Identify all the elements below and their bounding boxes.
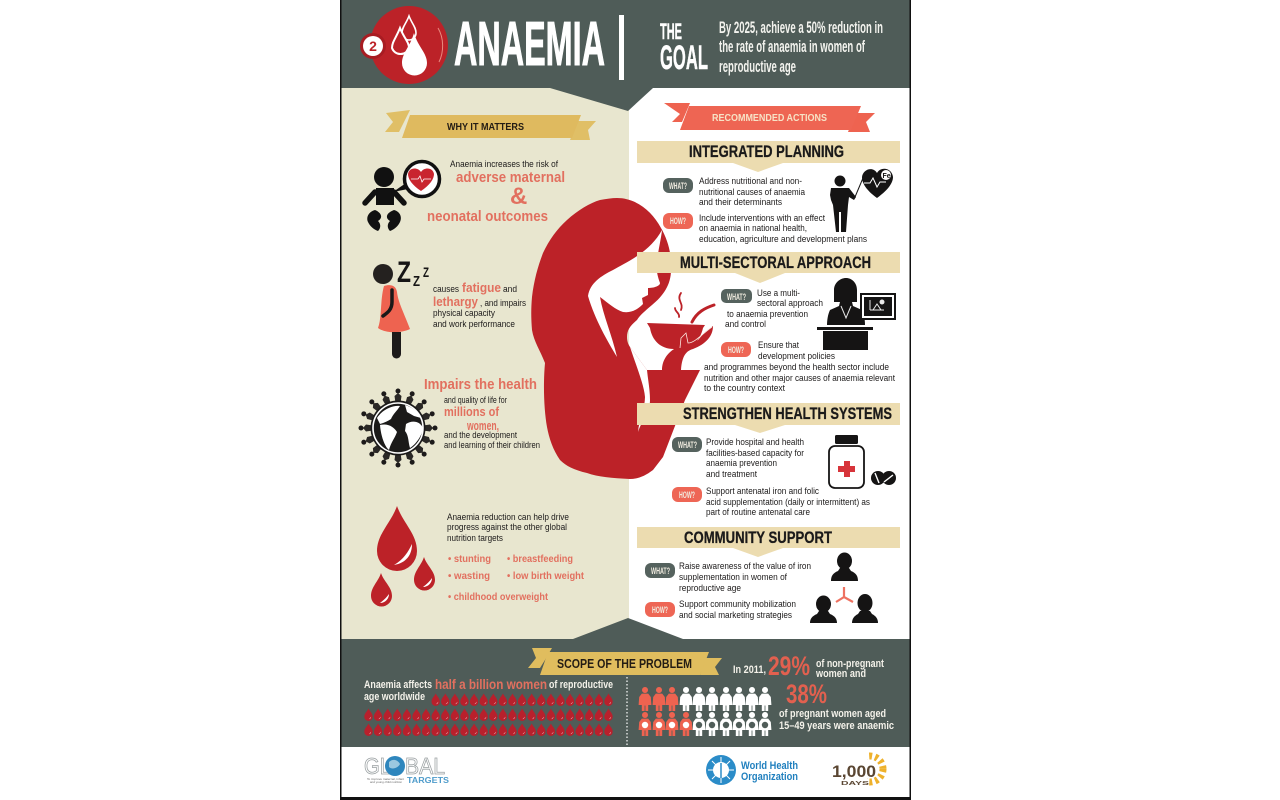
section: multi-sectoral approach: sectoral approach — [757, 298, 823, 308]
text: other global nutrition targets: Anaemia reduction can help drive — [447, 512, 569, 522]
logo: world health organization — [706, 755, 798, 785]
section: integrated planning: INTEGRATED PLANNING — [689, 142, 844, 161]
text: half a billion women — [364, 676, 613, 703]
goal statement: By 2025, achieve a 50% reduction in — [719, 18, 883, 37]
logo: global targets: GL — [364, 753, 391, 779]
text: prevalence statistics: of pregnant women aged — [779, 708, 886, 720]
section: strengthen health systems: STRENGTHEN HEALTH SYSTEMS — [683, 404, 892, 423]
section: community support: supplementation in women of — [679, 572, 787, 582]
text: adverse maternal and neonatal outcomes: adverse maternal — [456, 169, 565, 186]
logo: world health organization: Organization — [741, 771, 798, 783]
section: strengthen health systems: Provide hospital and health — [706, 437, 804, 447]
icon: woman at desk with screen — [817, 278, 895, 350]
section: community support: reproductive age — [679, 583, 741, 593]
logo: global targets: TARGETS — [407, 776, 450, 785]
text: impairs the health: Impairs the health — [424, 376, 537, 393]
pictogram: non-pregnant women — [639, 687, 771, 711]
text: prevalence statistics: 38% — [786, 679, 827, 709]
text: half a billion women: Anaemia affects — [364, 679, 432, 691]
goal statement — [719, 18, 883, 76]
logo: world health organization: World Health — [741, 760, 798, 772]
ribbon: scope of the problem — [528, 648, 722, 675]
logo: global targets: and young child nutrition — [370, 780, 402, 784]
text: fatigue and lethargy: , and impairs — [480, 298, 526, 308]
text: fatigue and lethargy — [433, 280, 526, 329]
text: prevalence statistics: of non-pregnant — [816, 658, 884, 670]
text: adverse maternal and neonatal outcomes: Anaemia increases the risk of — [450, 159, 558, 169]
section: integrated planning: education, agriculture and development plans — [699, 234, 867, 244]
text: half a billion women: age worldwide — [364, 691, 425, 703]
section: integrated planning: Include interventions with an effect — [699, 213, 825, 223]
text: other global nutrition targets — [447, 512, 584, 603]
section: integrated planning: Address nutritional and non- — [699, 176, 802, 186]
section: community support: and social marketing strategies — [679, 610, 792, 620]
section: community support: Raise awareness of the value of iron — [679, 561, 811, 571]
text: impairs the health: women, — [466, 418, 499, 433]
text: impairs the health: and the development — [444, 430, 517, 440]
section: integrated planning: on anaemia in national health, — [699, 223, 807, 233]
icon: baby with heart bubble — [365, 162, 440, 231]
text: half a billion women: half a billion women — [435, 676, 547, 692]
pictogram: blood drops rows — [364, 694, 613, 736]
icon: anaemia target badge — [360, 6, 448, 84]
section: strengthen health systems: Support antenatal iron and folic — [706, 486, 819, 496]
icon: tired pregnant woman: Z — [423, 264, 429, 280]
text: other global nutrition targets: • breastfeeding — [507, 553, 573, 565]
section: multi-sectoral approach: and control — [725, 319, 766, 329]
text: half a billion women: of reproductive — [549, 679, 613, 691]
section: integrated planning: and their determinants — [699, 197, 782, 207]
section: strengthen health systems: anaemia prevention — [706, 458, 777, 468]
section: community support: HOW? — [652, 605, 668, 615]
text: other global nutrition targets: • low birth weight — [507, 570, 584, 582]
text: fatigue and lethargy: and — [503, 284, 517, 294]
section: strengthen health systems: facilities-based capacity for — [706, 448, 804, 458]
text: impairs the health: millions of — [444, 404, 500, 419]
logo: global targets: To improve maternal, infant — [367, 777, 404, 781]
ribbon: recommended actions: RECOMMENDED ACTIONS — [712, 113, 827, 124]
section: strengthen health systems: and treatment — [706, 469, 757, 479]
section: community support: COMMUNITY SUPPORT — [684, 528, 832, 547]
logo: global targets — [364, 753, 450, 785]
text: adverse maternal and neonatal outcomes: neonatal outcomes — [427, 208, 548, 225]
section: integrated planning — [637, 141, 900, 244]
text: adverse maternal and neonatal outcomes — [427, 159, 565, 225]
logo: 1000 days — [832, 750, 883, 788]
section: multi-sectoral approach: Use a multi- — [757, 288, 800, 298]
section: multi-sectoral approach: HOW? — [728, 345, 744, 355]
text: fatigue and lethargy: and work performance — [433, 319, 515, 329]
title: ANAEMIA — [454, 10, 605, 79]
header band — [341, 0, 910, 111]
logo: 1000 days: 1,000 — [832, 762, 876, 781]
section: integrated planning: WHAT? — [669, 181, 687, 191]
section: strengthen health systems: WHAT? — [678, 440, 697, 450]
section: multi-sectoral approach: to the country context — [704, 383, 785, 393]
section: integrated planning: nutritional causes of anaemia — [699, 187, 805, 197]
text: other global nutrition targets: nutrition targets — [447, 533, 503, 543]
section: multi-sectoral approach: Ensure that — [758, 340, 799, 350]
text: fatigue and lethargy: causes — [433, 284, 459, 294]
section: community support: WHAT? — [651, 566, 670, 576]
goal statement: the rate of anaemia in women of — [719, 37, 865, 56]
icon: anaemia target badge: 2 — [369, 38, 377, 54]
logo: global targets: BAL — [405, 753, 445, 779]
text: other global nutrition targets: progress against the other global — [447, 522, 567, 532]
text: prevalence statistics: In 2011, — [733, 664, 766, 676]
text: prevalence statistics: women and — [815, 668, 866, 680]
section: strengthen health systems — [637, 403, 900, 517]
icon: community people — [810, 552, 878, 623]
icon: man pointing at iron heart — [830, 169, 893, 232]
text: fatigue and lethargy: fatigue — [462, 280, 501, 295]
text: adverse maternal and neonatal outcomes: & — [510, 183, 527, 210]
goal statement: reproductive age — [719, 57, 796, 76]
ribbon: why it matters: WHY IT MATTERS — [447, 122, 524, 133]
text: prevalence statistics: 15–49 years were anaemic — [779, 720, 894, 732]
icon: tired pregnant woman: Z — [413, 273, 420, 290]
text: fatigue and lethargy: lethargy — [433, 294, 479, 309]
text: prevalence statistics: 29% — [768, 651, 810, 681]
text: other global nutrition targets: • childhood overweight — [448, 591, 548, 603]
ribbon: why it matters — [385, 110, 596, 140]
section: community support: Support community mobilization — [679, 599, 796, 609]
icon: man pointing at iron heart: Fe — [882, 173, 891, 180]
section: multi-sectoral approach: MULTI-SECTORAL APPROACH — [680, 253, 871, 272]
section: multi-sectoral approach: development policies — [758, 351, 835, 361]
text: other global nutrition targets: • stunting — [448, 553, 491, 565]
text: other global nutrition targets: • wasting — [448, 570, 490, 582]
section: community support — [637, 527, 900, 620]
ribbon: scope of the problem: SCOPE OF THE PROBLEM — [557, 656, 692, 671]
logo: 1000 days: DAYS — [841, 781, 870, 787]
section: integrated planning: HOW? — [670, 216, 686, 226]
scope of the problem band — [341, 618, 910, 747]
section: multi-sectoral approach: to anaemia prevention — [727, 309, 808, 319]
text: impairs the health: and learning of their children — [444, 440, 540, 450]
illustration: woman drinking from bowl — [531, 198, 714, 479]
text: fatigue and lethargy: physical capacity — [433, 308, 495, 318]
section: strengthen health systems: part of routine antenatal care — [706, 507, 810, 517]
section: multi-sectoral approach: and programmes beyond the health sector include — [704, 362, 889, 372]
section: multi-sectoral approach: nutrition and other major causes of anaemia relevant — [704, 373, 895, 383]
text: prevalence statistics — [733, 651, 894, 732]
section: strengthen health systems: HOW? — [679, 490, 695, 500]
ribbon: recommended actions — [664, 103, 875, 132]
icon: globe with women — [358, 388, 438, 468]
heading: the goal — [660, 19, 708, 77]
pictogram: pregnant women — [639, 712, 771, 736]
text: impairs the health: and quality of life for — [444, 395, 507, 405]
text: impairs the health — [424, 376, 540, 450]
panel: why it matters background — [341, 88, 629, 640]
icon: medicine bottle and pills — [829, 435, 896, 488]
text: GOAL — [660, 39, 708, 77]
title divider bar — [619, 15, 624, 80]
icon: tired pregnant woman: Z — [397, 256, 411, 289]
icon: tired pregnant woman — [373, 256, 429, 358]
section: multi-sectoral approach — [637, 252, 900, 393]
section: multi-sectoral approach: WHAT? — [727, 292, 746, 302]
heading: the goal: THE — [660, 19, 682, 44]
section: strengthen health systems: acid supplementation (daily or intermittent) as — [706, 497, 870, 507]
icon: blood drops — [371, 506, 435, 606]
